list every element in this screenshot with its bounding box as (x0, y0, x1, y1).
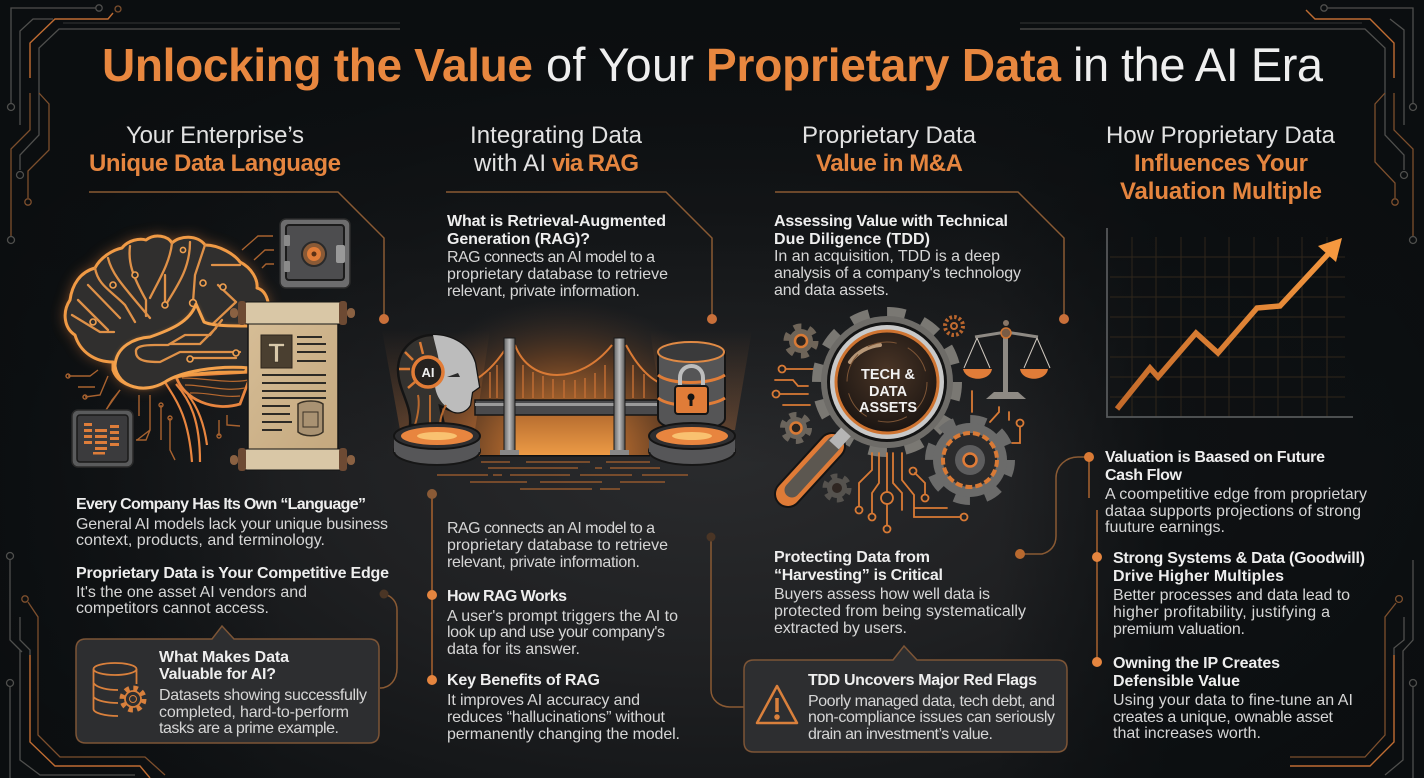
small gears (784, 317, 963, 499)
text block: competitive edge: Proprietary Data is Your Competitive Edge (76, 565, 389, 582)
panel: valuation multiple (1015, 122, 1367, 742)
text block: goodwill: premium valuation. (1113, 621, 1245, 638)
callout: what makes data valuable: completed, hard-to-perform (159, 704, 349, 721)
panel: M&A (706, 122, 1069, 752)
title: Unlocking the Value (102, 39, 533, 91)
heading: Unique Data Language (89, 150, 341, 177)
text block: TDD: In an acquisition, TDD is a deep (774, 248, 1000, 265)
connector (1015, 457, 1089, 559)
title: in the AI Era (1073, 38, 1324, 91)
title: Proprietary Data (706, 39, 1061, 91)
text block: what is RAG: proprietary database to retrieve (447, 266, 668, 283)
text block: how RAG works: look up and use your company's (447, 624, 665, 641)
scales (963, 320, 1050, 399)
timeline (1084, 452, 1102, 667)
heading: Influences Your (1134, 150, 1308, 177)
illustration: gears and magnifier: DATA (869, 384, 908, 400)
panel: unique data language (65, 122, 397, 743)
text block: TDD: analysis of a company's technology (774, 265, 1021, 282)
text block: TDD: Due Diligence (TDD) (774, 231, 930, 248)
connector to callout (706, 532, 744, 707)
AI head (398, 335, 479, 425)
callout: what makes data valuable: Datasets showing successfully (159, 687, 367, 704)
connector (446, 192, 717, 324)
text block: harvesting: Buyers assess how well data is (774, 586, 990, 603)
right pedestal (649, 423, 735, 465)
callout: red flags (744, 646, 1067, 752)
circuit traces (859, 453, 961, 525)
text block: key benefits: Key Benefits of RAG (447, 672, 600, 689)
text block: goodwill: Better processes and data lead to (1113, 587, 1350, 604)
text block: RAG connects: proprietary database to retrieve (447, 537, 668, 554)
illustration: gears and magnifier (772, 314, 1050, 532)
big gear (819, 314, 955, 450)
heading: with AI (473, 150, 546, 177)
text block: every company: Every Company Has Its Own “Language” (76, 496, 366, 513)
text block: every company: context, products, and terminology. (76, 532, 325, 549)
callout: red flags: drain an investment’s value. (808, 726, 993, 743)
text block: harvesting: Protecting Data from (774, 549, 930, 566)
text block: every company: General AI models lack your unique business (76, 516, 388, 533)
circuit frame: bottom left (6, 552, 165, 778)
left pedestal (394, 423, 480, 465)
heading (1106, 122, 1336, 205)
text block: competitive edge (76, 565, 389, 617)
handle (788, 446, 832, 494)
heading (802, 122, 977, 177)
text block: future cash flow: Cash Flow (1105, 467, 1183, 484)
text block: what is RAG: What is Retrieval-Augmented (447, 213, 666, 230)
text block: how RAG works: How RAG Works (447, 588, 567, 605)
text block: goodwill: higher profitability, justifying a (1113, 604, 1330, 621)
text block: owning the IP: that increases worth. (1113, 725, 1261, 742)
text block: what is RAG (447, 213, 668, 300)
text block: RAG connects (447, 520, 668, 571)
icon: warning triangle (757, 686, 797, 723)
lens (827, 322, 947, 442)
heading: Valuation Multiple (1120, 178, 1322, 205)
illustration: AI to database bridge (382, 300, 752, 489)
callout: red flags: TDD Uncovers Major Red Flags (808, 672, 1037, 689)
text block: competitive edge: competitors cannot access. (76, 600, 269, 617)
AI head: AI (422, 365, 434, 380)
text block: future cash flow: Valuation is Baased on Future (1105, 449, 1325, 466)
text block: RAG connects: relevant, private information. (447, 554, 640, 571)
icon: data chip (72, 390, 150, 467)
text block: how RAG works: data for its answer. (447, 641, 580, 658)
text block: goodwill (1113, 550, 1365, 638)
connector (775, 192, 1069, 324)
text block: goodwill: Strong Systems & Data (Goodwill) (1113, 550, 1365, 567)
callout: red flags: non-compliance issues can seriously (808, 709, 1055, 726)
callout: what makes data valuable (76, 626, 379, 743)
text block: TDD: and data assets. (774, 282, 889, 299)
icon: database gear (94, 663, 144, 716)
heading (470, 122, 643, 177)
text block: what is RAG: relevant, private information. (447, 283, 640, 300)
callout: what makes data valuable: Valuable for AI? (159, 666, 276, 683)
connector (89, 192, 389, 324)
text block: key benefits: permanently changing the model. (447, 726, 680, 743)
timeline (427, 489, 437, 685)
icon: vault safe (242, 219, 350, 288)
heading: Proprietary Data (802, 122, 977, 149)
circuit frame: top left (8, 5, 400, 243)
text block: harvesting: protected from being systematically (774, 603, 1026, 620)
callout: red flags: Poorly managed data, tech debt, and (808, 693, 1055, 710)
text block: what is RAG: Generation (RAG)? (447, 231, 590, 248)
callout: what makes data valuable: tasks are a prime example. (159, 720, 339, 737)
text block: TDD: Assessing Value with Technical (774, 213, 1008, 230)
text block: every company (76, 496, 388, 549)
panel: RAG (382, 122, 752, 743)
illustration: scroll (230, 301, 355, 471)
illustration: gears and magnifier: TECH & (861, 367, 916, 383)
text block: harvesting: “Harvesting” is Critical (774, 567, 943, 584)
illustration: circuit brain (65, 236, 269, 462)
title: of Your (546, 38, 694, 91)
connector to callout (380, 590, 397, 688)
line chart: rising arrow (1107, 228, 1353, 417)
text block: owning the IP: Owning the IP Creates (1113, 655, 1280, 672)
text block: how RAG works (447, 588, 678, 658)
text block: owning the IP: Using your data to fine-tune an AI (1113, 692, 1353, 709)
text block: how RAG works: A user's prompt triggers the AI to (447, 608, 678, 625)
callout: what makes data valuable: What Makes Data (159, 649, 289, 666)
heading: via RAG (552, 150, 639, 177)
heading: Integrating Data (470, 122, 643, 149)
circuit frame: bottom right (1290, 560, 1416, 778)
heading: Your Enterprise’s (126, 122, 304, 149)
text block: harvesting: extracted by users. (774, 620, 907, 637)
text block: competitive edge: It's the one asset AI vendors and (76, 584, 307, 601)
heading (89, 122, 341, 177)
illustration: gears and magnifier: ASSETS (859, 400, 917, 416)
text block: key benefits (447, 672, 680, 743)
scroll initial letter: T (268, 338, 285, 368)
circuit frame: top right (1020, 5, 1416, 243)
second gear (930, 420, 1010, 500)
text block: owning the IP: creates a unique, ownable asset (1113, 709, 1334, 726)
text block: future cash flow (1105, 449, 1367, 536)
text block: key benefits: It improves AI accuracy and (447, 692, 640, 709)
text block: goodwill: Drive Higher Multiples (1113, 568, 1284, 585)
text block: future cash flow: dataa supports projections of strong (1105, 503, 1361, 520)
text block: owning the IP (1113, 655, 1353, 742)
text block: TDD (774, 213, 1021, 299)
text block: owning the IP: Defensible Value (1113, 673, 1240, 690)
database with padlock (658, 342, 725, 430)
heading: Value in M&A (816, 150, 963, 177)
title (102, 38, 1324, 91)
text block: RAG connects: RAG connects an AI model to a (447, 520, 655, 537)
text block: harvesting (774, 549, 1026, 637)
text block: future cash flow: A coompetitive edge from proprietary (1105, 486, 1367, 503)
text block: key benefits: reduces “hallucinations” without (447, 709, 666, 726)
text block: what is RAG: RAG connects an AI model to a (447, 249, 655, 266)
text block: future cash flow: fuuture earnings. (1105, 519, 1225, 536)
heading: How Proprietary Data (1106, 122, 1336, 149)
